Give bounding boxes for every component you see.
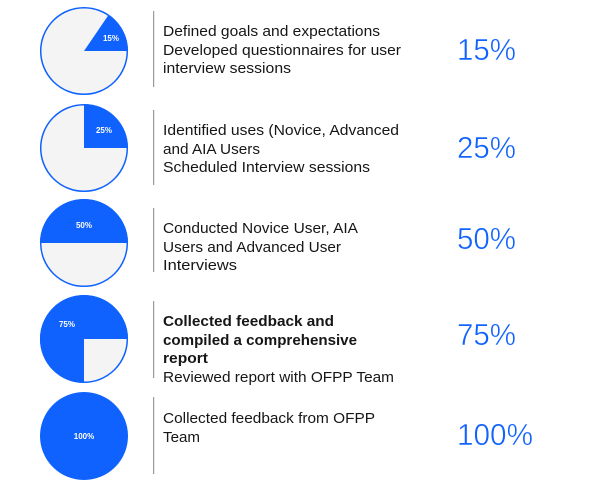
pie chart: 100% [40,392,128,480]
divider [153,301,154,378]
pie chart: 25% [41,104,128,191]
pie chart: 50% [40,199,128,286]
text block: interviews: Conducted Novice User, AIA [163,221,358,237]
text block: users: Scheduled Interview sessions [163,160,370,176]
row: 75% progress [40,295,516,386]
pie chart: 75% [40,295,128,383]
row: 100% progress [40,392,533,480]
pie chart: 15%: 15% [103,34,119,43]
text block: goals [163,24,401,77]
divider [153,397,154,474]
pie chart: 50%: 50% [76,221,92,230]
text block: interviews: Interviews [163,258,237,274]
text block: goals: interview sessions [163,61,291,77]
row: 25% progress [41,104,516,191]
pie chart: 15% [41,8,128,94]
text block: feedback [163,411,375,446]
text block: feedback: Team [163,430,200,446]
percentage: 100%: 100% [457,418,533,452]
row: 50% progress [40,199,516,286]
text block: users: Identified uses (Novice, Advanced [163,123,399,139]
text block: report: report [163,351,208,367]
text block: report: Reviewed report with OFPP Team [163,370,394,386]
percentage: 15%: 15% [457,33,516,67]
text block: goals: Defined goals and expectations [163,24,380,40]
text block: goals: Developed questionnaires for user [163,43,401,59]
text block: report [163,314,394,386]
text block: report: compiled a comprehensive [163,333,357,349]
text block: feedback: Collected feedback from OFPP [163,411,375,427]
row: 15% progress [41,8,516,94]
pie chart: 100%: 100% [74,432,94,441]
text block: interviews: Users and Advanced User [163,240,341,256]
pie chart: 75%: 75% [59,320,75,329]
divider [153,208,154,272]
text block: report: Collected feedback and [163,314,334,330]
percentage: 75%: 75% [457,318,516,352]
divider [153,11,154,87]
text block: users [163,123,399,176]
pie chart: 25%: 25% [96,126,112,135]
percentage: 50%: 50% [457,222,516,256]
divider [153,110,154,185]
percentage: 25%: 25% [457,131,516,165]
text block: users: and AIA Users [163,142,260,158]
text block: interviews [163,221,358,274]
